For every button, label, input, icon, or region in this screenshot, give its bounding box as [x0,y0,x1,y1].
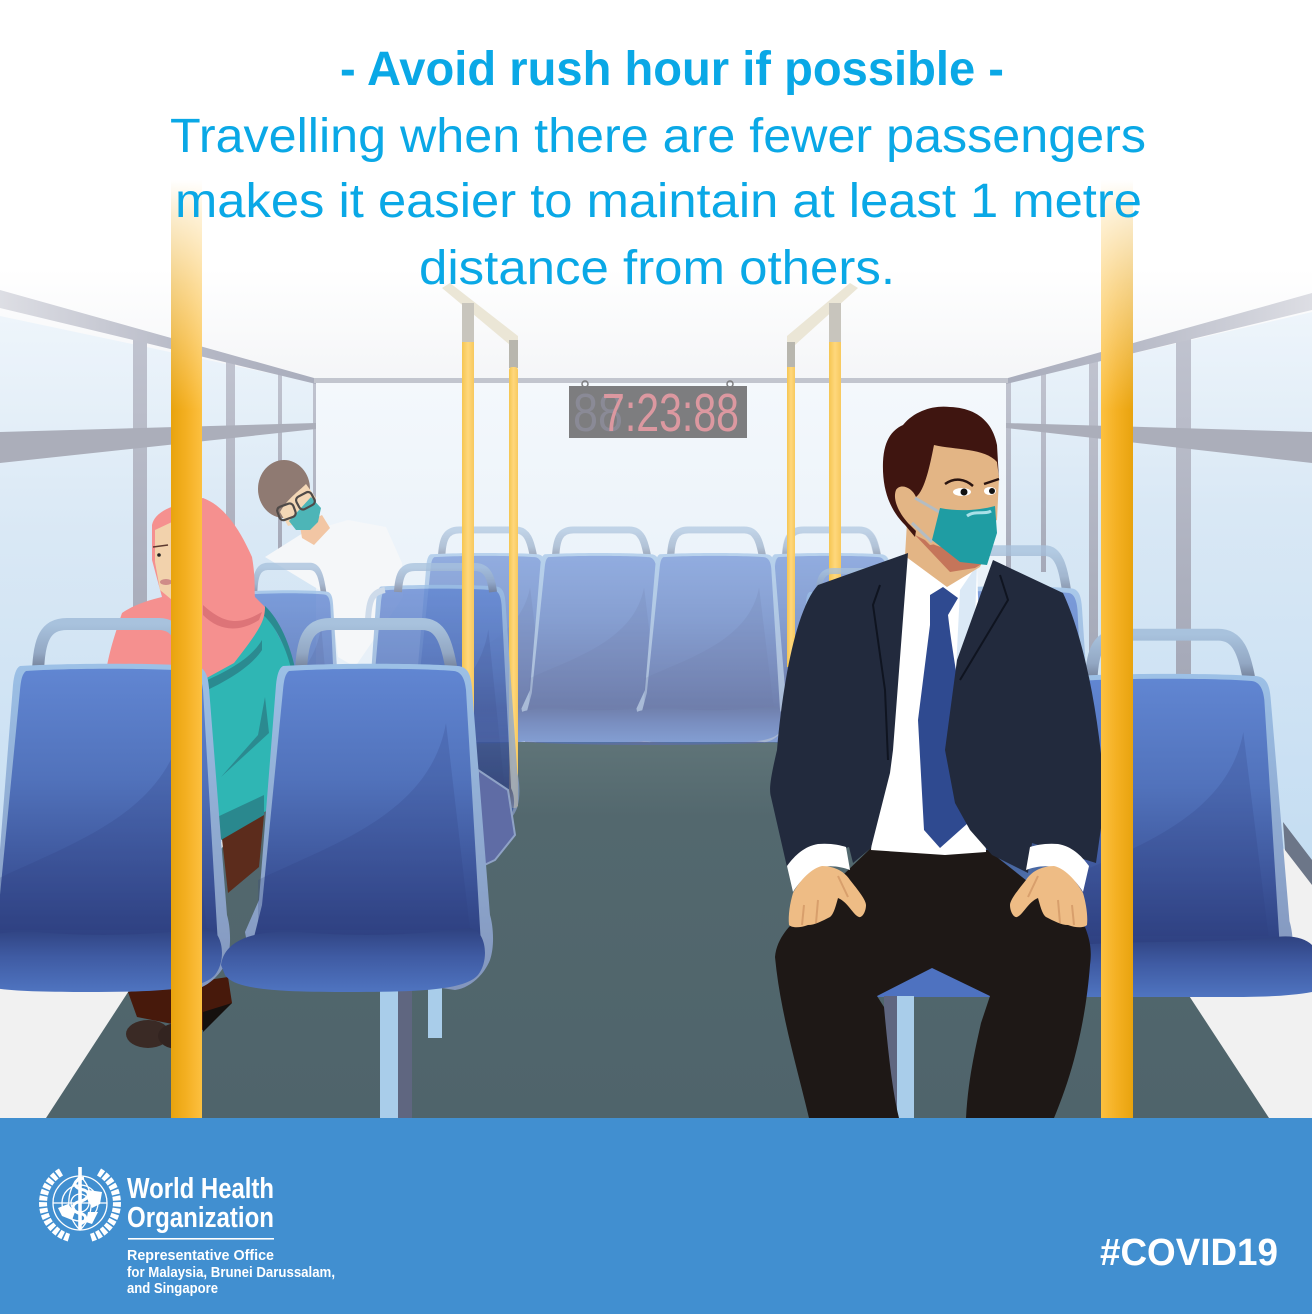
divider line [128,1238,274,1240]
heading: - Avoid rush hour if possible - [340,43,1004,96]
far row of seats [393,530,903,745]
scalloped seat stack [478,770,515,868]
office location line: for Malaysia, Brunei Darussalam, [127,1265,335,1281]
pole tip under seat [464,974,474,982]
body line 1: Travelling when there are fewer passengers [170,110,1146,163]
shirt [871,553,986,855]
footer band [0,1118,1312,1314]
passenger with glasses [258,460,403,667]
shirt cuffs and hands [787,844,1089,927]
icon: WHO emblem [43,1167,117,1238]
back wall rail [314,378,1008,383]
second row seats [218,551,1098,882]
woman passenger with hijab [107,498,296,1049]
digital clock [569,381,747,443]
eyes and brows [945,479,999,496]
body line 3: distance from others. [419,242,895,295]
right windows [1006,293,1312,885]
organization name [127,1173,335,1297]
neck [905,522,985,587]
man in suit wearing mask [770,407,1105,1118]
floor [46,742,1269,1118]
front middle seat legs [380,985,442,1118]
front thin pole [462,342,474,980]
back wall of bus [314,380,1008,800]
Singapore line: and Singapore [127,1281,218,1297]
hair [883,407,999,537]
title text [170,43,1146,295]
floor side panels [0,780,1312,1120]
World Health: World Health [127,1173,274,1205]
tie [918,587,968,848]
face mask [912,498,997,565]
large left yellow pole [171,180,202,1118]
front middle seat [221,624,493,992]
digital clock: 7:23:88 [602,383,739,443]
front left seat [0,624,230,992]
hashtag: #COVID19 [1100,1232,1278,1274]
digital clock: 88 [573,383,623,443]
thin grab poles [442,283,858,808]
man seat and leg [875,966,992,1118]
background: bus ceiling [0,0,1312,383]
large right yellow pole [1101,180,1133,1118]
left windows [0,290,316,940]
body line 2: makes it easier to maintain at least 1 metre [175,175,1142,228]
Representative Office: Representative Office [127,1248,274,1264]
right seat behind man [1032,635,1312,997]
Organization: Organization [127,1202,274,1234]
face and ear [895,445,999,545]
trousers [775,848,1091,1118]
jacket [770,553,908,867]
